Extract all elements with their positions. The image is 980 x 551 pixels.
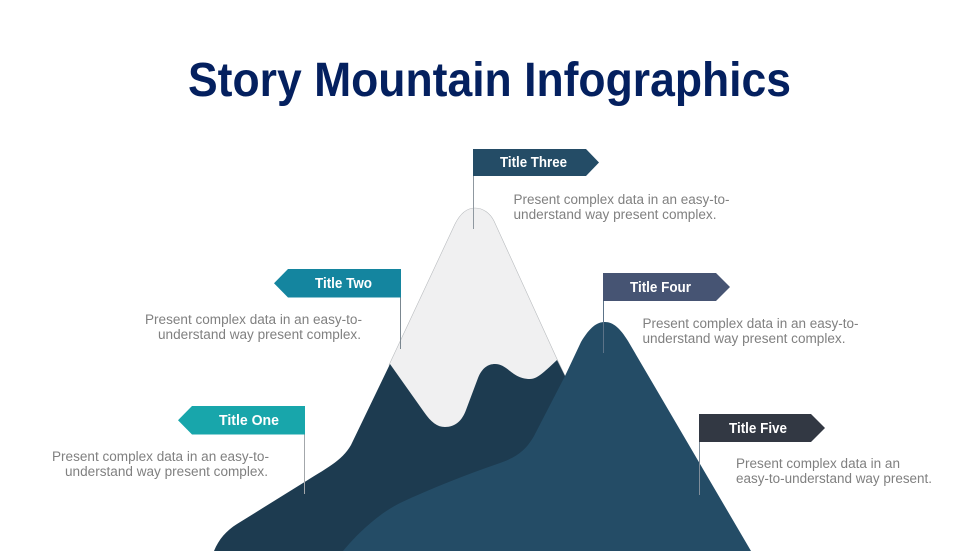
text: Title Five description: Present complex data in an <box>736 456 900 471</box>
dark back mountain <box>214 360 600 551</box>
text: Title One description: understand way present complex. <box>65 464 268 479</box>
flag: Title Two <box>274 269 401 349</box>
text: Title Two description: Present complex data in an easy-to- <box>145 312 362 327</box>
text: Title One description: Present complex data in an easy-to- <box>52 449 269 464</box>
text: Title One description <box>52 449 269 479</box>
mountain illustration <box>214 208 751 551</box>
text: Title Four description: Present complex data in an easy-to- <box>642 316 858 331</box>
flag: Title Five: Title Five <box>729 421 787 437</box>
text: Title Five description <box>736 456 932 486</box>
text: Title Four description: understand way present complex. <box>642 331 846 346</box>
text: Title Three description: Present complex data in an easy-to- <box>514 192 730 207</box>
flag: Title Three <box>473 149 599 229</box>
flag: Title Five <box>699 414 825 495</box>
text: Title Two description <box>145 312 362 342</box>
snow-capped peak <box>389 208 566 440</box>
title: Story Mountain Infographics <box>188 54 791 107</box>
flag: Title Three: Title Three <box>500 155 567 171</box>
flag: Title Four: Title Four <box>630 280 691 296</box>
text: Title Three description: understand way present complex. <box>514 207 716 222</box>
text: Title Five description: easy-to-understand way present. <box>736 471 932 486</box>
text: Title Two description: understand way present complex. <box>158 327 361 342</box>
flag: Title Two: Title Two <box>315 276 372 292</box>
flag: Title One <box>178 406 305 494</box>
text: Title Three description <box>514 192 730 222</box>
text: Title Four description <box>642 316 858 346</box>
flag: Title Four <box>603 273 730 353</box>
flag: Title One: Title One <box>219 413 279 429</box>
front mountain <box>343 322 751 551</box>
